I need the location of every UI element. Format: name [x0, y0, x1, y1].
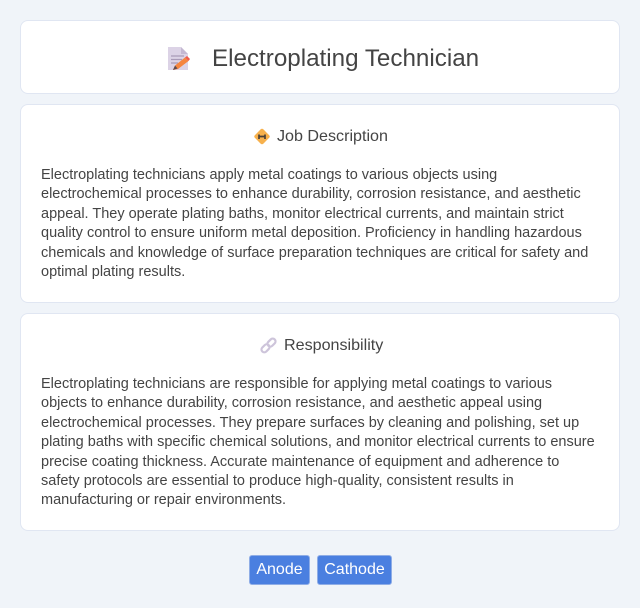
text: job description — [41, 167, 588, 280]
icon: construction diamond — [254, 128, 270, 144]
icon: chain link — [260, 338, 276, 354]
text: responsibility: electrochemical processes. They prepare surfaces by cleaning and polishing, set up — [41, 415, 579, 431]
text: job description: quality control to ensure uniform metal deposition. Proficiency in handling hazardous — [41, 225, 582, 241]
tag: cathode: Cathode — [324, 561, 385, 578]
tag: cathode — [317, 555, 392, 585]
text: responsibility: precise coating thickness. Accurate maintenance of equipment and adherence to — [41, 454, 559, 470]
heading: responsibility: Responsibility — [284, 336, 383, 354]
text: responsibility: Electroplating technicians are responsible for applying metal coatings to various — [41, 376, 552, 392]
text: responsibility — [41, 376, 595, 508]
text: job description: chemicals and knowledge of surface preparation techniques are critical for safety and — [41, 245, 588, 261]
panel: title card — [20, 20, 620, 94]
panel: job description — [20, 104, 620, 303]
text: responsibility: plating baths with specific chemical solutions, and monitor electrical currents to ensure — [41, 434, 595, 450]
text: responsibility: manufacturing or repair environments. — [41, 492, 286, 508]
heading: job description: Job Description — [277, 127, 388, 145]
title: Electroplating Technician — [212, 45, 479, 72]
panel: responsibility — [20, 313, 620, 531]
icon: document with pencil — [168, 47, 190, 70]
text: job description: Electroplating technicians apply metal coatings to various objects using — [41, 167, 497, 183]
text: responsibility: objects to enhance durability, corrosion resistance, and aesthetic appeal using — [41, 395, 542, 411]
text: job description: optimal plating results. — [41, 264, 185, 280]
text: job description: electrochemical processes to enhance durability, corrosion resistance, and aesthetic — [41, 186, 581, 202]
tag: anode: Anode — [256, 561, 303, 578]
text: job description: appeal. They operate plating baths, monitor electrical currents, and maintain strict — [41, 206, 564, 222]
tag: anode — [249, 555, 310, 585]
text: responsibility: safety protocols are essential to produce high-quality, consistent results in — [41, 473, 514, 489]
